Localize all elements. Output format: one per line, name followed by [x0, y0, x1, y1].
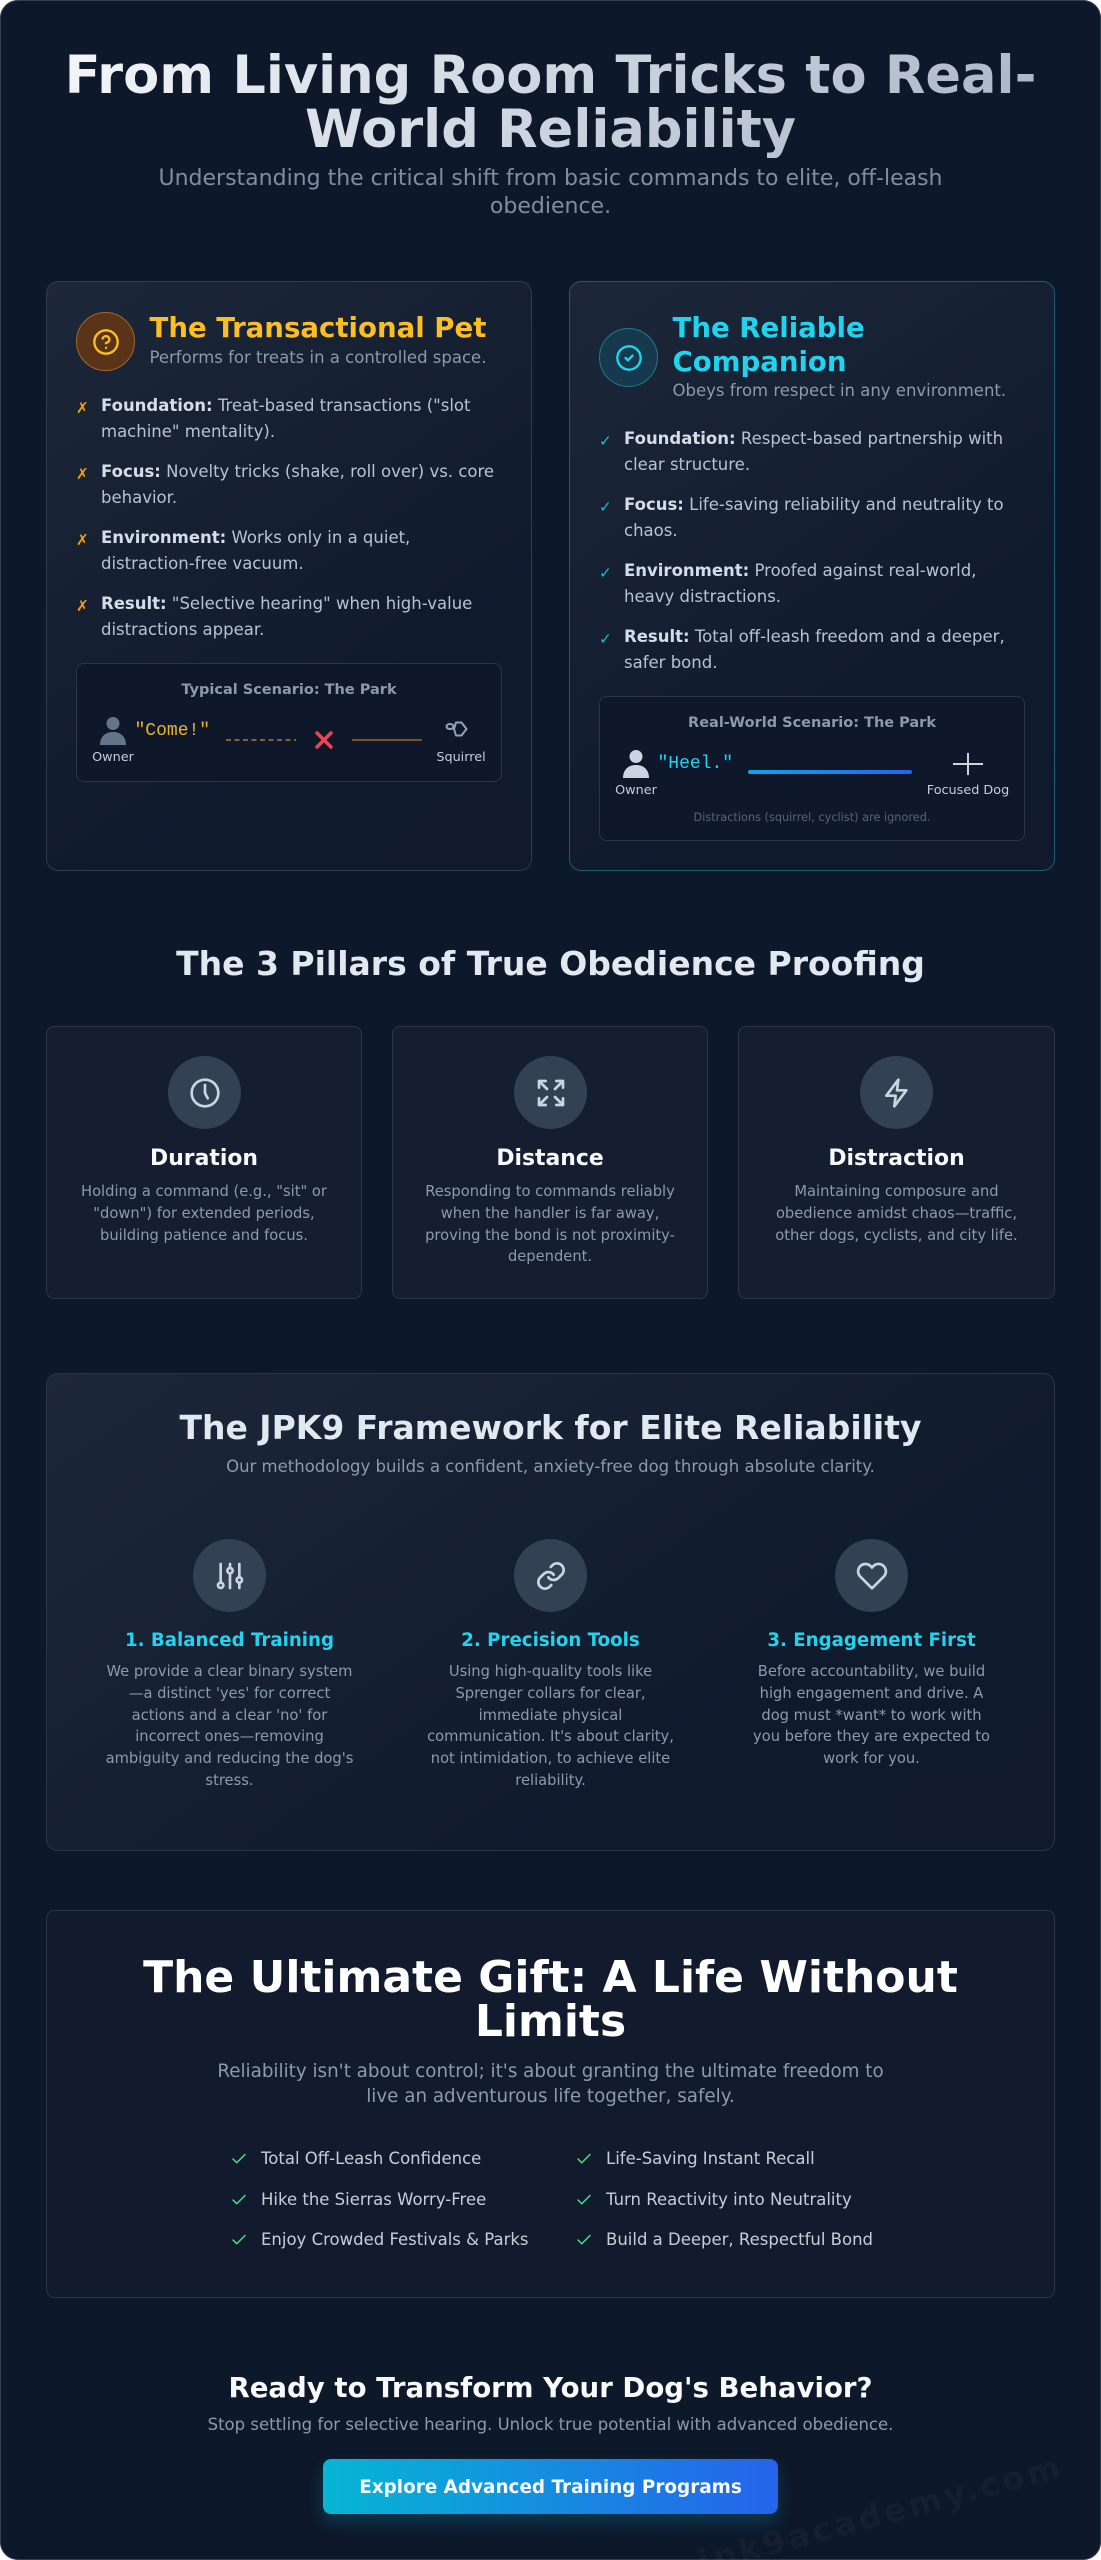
pillar description: when the handler is far away, — [441, 1205, 659, 1222]
step description: stress. — [205, 1772, 254, 1789]
step description: reliability. — [515, 1772, 586, 1789]
heading: three pillars: The 3 Pillars of True Obedience Proofing — [176, 944, 925, 983]
icon: clock — [168, 1056, 241, 1129]
gift text — [217, 2061, 884, 2107]
heading: reliable companion — [672, 311, 865, 378]
subtitle: Understanding the critical shift from basic commands to elite, off-leash — [158, 166, 942, 190]
list: reliable traits: clear structure. — [624, 455, 750, 474]
list: reliable traits: Result: Total off-leash freedom and a deeper, — [624, 627, 1005, 646]
panel: ultimate gift — [46, 1910, 1055, 2298]
step: precision tools — [427, 1539, 674, 1789]
label: focused dog: Focused Dog — [927, 783, 1009, 798]
title — [0, 48, 1101, 158]
heading: reliable companion: Companion — [672, 345, 847, 378]
list: reliable traits: ✓ — [599, 432, 612, 450]
icon: question mark — [76, 312, 135, 371]
cta button: Explore Advanced Training Programs — [359, 2477, 742, 2498]
icon: link — [514, 1539, 587, 1612]
list: transactional traits: distraction-free vacuum. — [101, 554, 304, 573]
cta button — [323, 2459, 778, 2514]
step description: high engagement and drive. A — [760, 1685, 983, 1702]
step description — [106, 1663, 353, 1789]
benefit: Enjoy Crowded Festivals & Parks — [261, 2230, 529, 2249]
list: transactional traits: ✗ — [76, 465, 89, 483]
caption: Obeys from respect in any environment. — [672, 381, 1006, 400]
list: transactional traits — [76, 396, 494, 639]
gift heading: The Ultimate Gift: A Life Without — [143, 1952, 958, 2003]
label: squirrel: Squirrel — [436, 750, 486, 765]
pillar description: Maintaining composure and — [794, 1183, 999, 1200]
list: reliable traits: ✓ — [599, 498, 612, 516]
cta text: Stop settling for selective hearing. Unlock true potential with advanced obedience. — [208, 2415, 893, 2434]
step description: We provide a clear binary system — [106, 1663, 352, 1680]
list: reliable traits — [599, 429, 1005, 672]
pillar: duration — [46, 1026, 362, 1299]
title: From Living Room Tricks to Real- — [65, 44, 1036, 106]
step description — [427, 1663, 674, 1789]
step title: 2. Precision Tools — [461, 1630, 640, 1651]
step description: immediate physical — [479, 1707, 622, 1724]
benefit: Build a Deeper, Respectful Bond — [606, 2230, 873, 2249]
benefits list — [232, 2149, 873, 2249]
benefit: Turn Reactivity into Neutrality — [606, 2190, 852, 2209]
pillar description: "down") for extended periods, — [93, 1205, 315, 1222]
label: owner: Owner — [615, 783, 657, 798]
scenario heading: Real-World Scenario: The Park — [688, 714, 936, 730]
benefit: Total Off-Leash Confidence — [261, 2149, 481, 2168]
list: transactional traits: behavior. — [101, 488, 177, 507]
icon: check circle — [599, 328, 658, 387]
step description: not intimidation, to achieve elite — [431, 1750, 670, 1767]
subtitle — [158, 166, 942, 219]
icon: sliders — [193, 1539, 266, 1612]
pillar description — [775, 1183, 1018, 1244]
pillar title: Distance — [496, 1146, 604, 1171]
title: World Reliability — [305, 99, 796, 160]
list: transactional traits: ✗ — [76, 597, 89, 615]
broken signal line — [226, 731, 422, 749]
step description: —a distinct 'yes' for correct — [129, 1685, 330, 1702]
step description: incorrect ones—removing — [135, 1728, 324, 1745]
cta heading: Ready to Transform Your Dog's Behavior? — [228, 2371, 873, 2404]
note: distractions ignored: Distractions (squirrel, cyclist) are ignored. — [694, 811, 930, 824]
step: engagement first — [753, 1539, 990, 1767]
pillar description: obedience amidst chaos—traffic, — [776, 1205, 1017, 1222]
pillar description: dependent. — [508, 1248, 592, 1265]
step description: ambiguity and reducing the dog's — [106, 1750, 353, 1767]
list: reliable traits: chaos. — [624, 521, 678, 540]
list: transactional traits: Foundation: Treat-based transactions ("slot — [101, 396, 470, 415]
list: reliable traits: heavy distractions. — [624, 587, 781, 606]
connection line — [748, 770, 912, 774]
list: reliable traits: Focus: Life-saving reliability and neutrality to — [624, 495, 1004, 514]
pillar description: Holding a command (e.g., "sit" or — [81, 1183, 327, 1200]
icon: squirrel — [446, 722, 468, 736]
pillar: distance — [392, 1026, 708, 1299]
gift text: live an adventurous life together, safely. — [366, 2086, 735, 2107]
list: reliable traits: Foundation: Respect-based partnership with — [624, 429, 1003, 448]
framework subheading: Our methodology builds a confident, anxiety-free dog through absolute clarity. — [226, 1457, 875, 1476]
pillar description: proving the bond is not proximity- — [425, 1227, 675, 1244]
icon: owner — [100, 717, 126, 745]
list: transactional traits: ✗ — [76, 531, 89, 549]
benefit: Hike the Sierras Worry-Free — [261, 2190, 486, 2209]
step description: Before accountability, we build — [758, 1663, 985, 1680]
list: reliable traits: Environment: Proofed against real-world, — [624, 561, 976, 580]
step: balanced training — [106, 1539, 353, 1789]
gift text: Reliability isn't about control; it's about granting the ultimate freedom to — [217, 2061, 884, 2082]
caption: Performs for treats in a controlled space. — [150, 348, 486, 367]
icon: owner — [623, 750, 649, 778]
diagram: typical scenario — [76, 663, 502, 782]
step description: dog must *want* to work with — [761, 1707, 982, 1724]
gift heading — [143, 1952, 958, 2047]
list: reliable traits: ✓ — [599, 630, 612, 648]
icon: lightning — [860, 1056, 933, 1129]
list: transactional traits: Environment: Works only in a quiet, — [101, 528, 410, 547]
panel: the transactional pet — [46, 281, 532, 871]
command: come: "Come!" — [134, 721, 210, 741]
icon: expand arrows — [514, 1056, 587, 1129]
panel: the reliable companion — [569, 281, 1055, 871]
heading: transactional pet: The Transactional Pet — [150, 311, 486, 344]
step title: 3. Engagement First — [767, 1630, 976, 1651]
list: transactional traits: Result: "Selective hearing" when high-value — [101, 594, 472, 613]
list: transactional traits: machine" mentality). — [101, 422, 275, 441]
label: owner: Owner — [92, 750, 134, 765]
scenario heading: Typical Scenario: The Park — [181, 682, 397, 698]
step title: 1. Balanced Training — [125, 1630, 334, 1651]
list: reliable traits: safer bond. — [624, 653, 717, 672]
pillar title: Distraction — [828, 1146, 965, 1171]
pillar title: Duration — [150, 1146, 258, 1171]
step description: you before they are expected to — [753, 1728, 990, 1745]
icon: heart — [835, 1539, 908, 1612]
step description: Sprenger collars for clear, — [455, 1685, 646, 1702]
list: transactional traits: distractions appear. — [101, 620, 264, 639]
pillar description — [81, 1183, 327, 1244]
list: reliable traits: ✓ — [599, 564, 612, 582]
pillar: distraction — [738, 1026, 1055, 1299]
heading: reliable companion: The Reliable — [672, 311, 865, 344]
pillar description: other dogs, cyclists, and city life. — [775, 1227, 1018, 1244]
step description: communication. It's about clarity, — [427, 1728, 674, 1745]
list: transactional traits: Focus: Novelty tricks (shake, roll over) vs. core — [101, 462, 494, 481]
step description: work for you. — [823, 1750, 920, 1767]
step description: Using high-quality tools like — [449, 1663, 652, 1680]
benefit: Life-Saving Instant Recall — [606, 2149, 815, 2168]
pillar description: Responding to commands reliably — [425, 1183, 675, 1200]
subtitle: obedience. — [490, 194, 611, 219]
icon: focused dog — [953, 753, 983, 775]
pillar description: building patience and focus. — [100, 1227, 308, 1244]
step description: actions and a clear 'no' for — [132, 1707, 327, 1724]
command: heel: "Heel." — [658, 754, 733, 774]
pillar description — [425, 1183, 675, 1265]
list: transactional traits: ✗ — [76, 399, 89, 417]
step description — [753, 1663, 990, 1767]
panel: jpk9 framework — [46, 1373, 1055, 1851]
gift heading: Limits — [475, 1996, 626, 2047]
framework heading: The JPK9 Framework for Elite Reliability — [179, 1408, 922, 1447]
diagram: real-world scenario — [599, 696, 1025, 841]
